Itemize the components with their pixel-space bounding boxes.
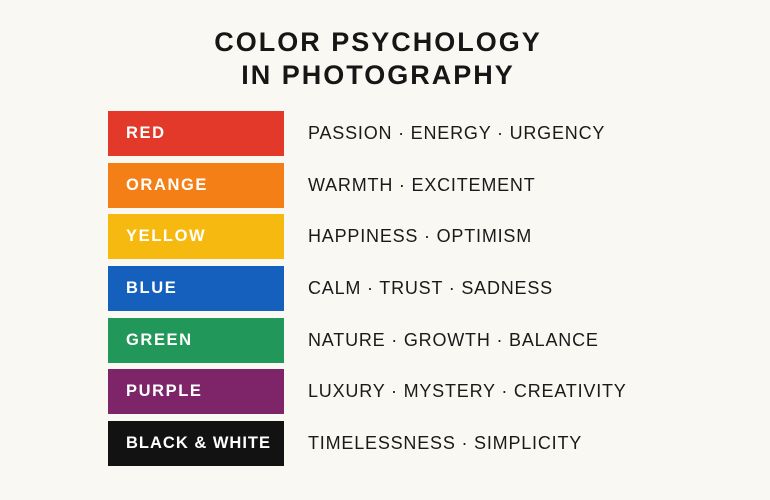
bar: orange: ORANGE — [126, 176, 208, 194]
bar: blue: BLUE — [126, 279, 177, 297]
text: black & white meanings: TIMELESSNESS · SIMPLICITY — [308, 433, 582, 453]
text: orange meanings: WARMTH · EXCITEMENT — [308, 175, 536, 195]
bar: purple: PURPLE — [126, 382, 203, 400]
title: COLOR PSYCHOLOGY — [214, 27, 542, 57]
bar: green — [108, 318, 284, 363]
bar: red: RED — [126, 124, 166, 142]
bar: red — [108, 111, 284, 156]
text: green meanings: NATURE · GROWTH · BALANCE — [308, 330, 599, 350]
text: red meanings: PASSION · ENERGY · URGENCY — [308, 123, 605, 143]
bar: yellow — [108, 214, 284, 259]
bar: blue — [108, 266, 284, 311]
text: yellow meanings: HAPPINESS · OPTIMISM — [308, 226, 532, 246]
title — [214, 27, 542, 90]
text: purple meanings: LUXURY · MYSTERY · CREATIVITY — [308, 381, 627, 401]
bar: black & white — [108, 421, 284, 466]
title: IN PHOTOGRAPHY — [241, 60, 515, 90]
bar: purple — [108, 369, 284, 414]
bar: orange — [108, 163, 284, 208]
bar: yellow: YELLOW — [126, 227, 206, 245]
text: blue meanings: CALM · TRUST · SADNESS — [308, 278, 553, 298]
bar: green: GREEN — [126, 331, 193, 349]
bar: black & white: BLACK & WHITE — [126, 434, 271, 452]
